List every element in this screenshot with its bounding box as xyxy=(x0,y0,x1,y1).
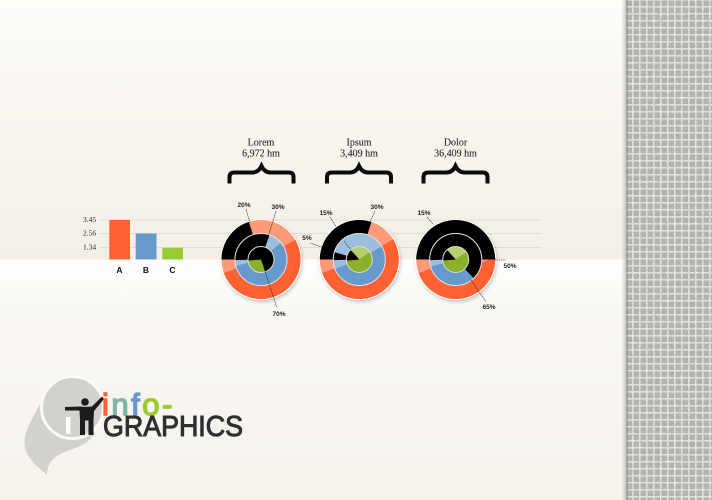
heading: Dolor xyxy=(434,138,477,160)
percentage labels xyxy=(237,202,517,318)
heading: Ipsum: Ipsum xyxy=(346,138,372,148)
percentage labels: 65% xyxy=(482,304,496,311)
value labels xyxy=(83,215,96,252)
logo: figure head xyxy=(81,398,89,406)
category labels xyxy=(116,265,176,275)
value labels: 2.56 xyxy=(83,228,96,238)
heading: Ipsum xyxy=(340,138,378,160)
icon: brace 1 xyxy=(230,166,294,184)
chart: donut Dolor xyxy=(415,219,496,300)
percentage labels: 30% xyxy=(370,204,384,211)
percentage labels: 70% xyxy=(272,311,286,318)
percentage labels: 50% xyxy=(503,263,517,270)
logo: figure xyxy=(65,396,104,435)
category labels: A xyxy=(116,265,123,275)
bar C xyxy=(162,248,183,260)
chart: donut Lorem xyxy=(220,219,302,300)
icon: brace 3 xyxy=(424,166,488,184)
logo xyxy=(25,376,243,475)
panel: tiled right strip xyxy=(623,0,712,500)
category labels: B xyxy=(143,265,149,275)
logo: white i xyxy=(66,417,70,434)
heading: Dolor: 36,409 hm xyxy=(434,148,477,160)
bar A xyxy=(109,220,130,260)
bar B xyxy=(136,234,156,260)
background: upper band xyxy=(0,0,626,260)
value labels: 1.34 xyxy=(83,242,96,252)
icon: brace 2 xyxy=(327,166,391,184)
logo: info- wordmark: info- xyxy=(102,387,175,422)
percentage labels: 30% xyxy=(271,204,285,211)
percentage labels: 15% xyxy=(417,210,431,217)
percentage labels: 5% xyxy=(302,235,312,242)
heading: Lorem: 6,972 hm xyxy=(242,148,280,160)
logo: teardrop tail xyxy=(25,397,95,475)
leader lines xyxy=(246,209,506,308)
category labels: C xyxy=(169,265,176,275)
background: lower band xyxy=(0,260,626,500)
heading: Lorem xyxy=(242,138,280,160)
heading: Lorem: Lorem xyxy=(248,138,275,148)
heading: Ipsum: 3,409 hm xyxy=(340,148,378,160)
bar chart xyxy=(83,215,542,275)
percentage labels: 20% xyxy=(237,202,251,209)
value labels: 3.45 xyxy=(83,215,96,224)
percentage labels: 15% xyxy=(319,210,333,217)
logo: GRAPHICS wordmark: GRAPHICS xyxy=(103,411,243,443)
logo: circle xyxy=(42,376,104,438)
chart: donut Ipsum xyxy=(319,219,400,300)
heading: Dolor: Dolor xyxy=(444,138,468,148)
